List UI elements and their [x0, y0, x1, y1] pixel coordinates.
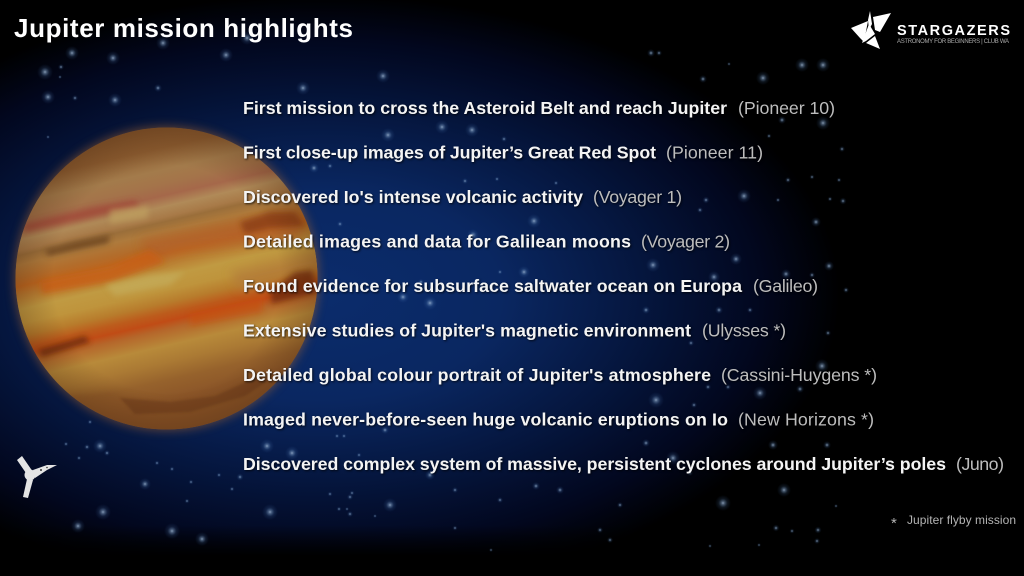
footnote: * — [891, 515, 897, 532]
planet: Jupiter — [8, 120, 324, 436]
footnote — [891, 513, 1016, 532]
mission: Ulysses: (Ulysses *) — [702, 320, 786, 340]
footnote: Jupiter flyby mission — [907, 513, 1016, 527]
mission: Voyager 1: (Voyager 1) — [593, 187, 682, 207]
mission: Galileo: (Galileo) — [753, 276, 818, 296]
mission: Voyager 1: Discovered Io's intense volcanic activity — [243, 187, 583, 207]
mission: Pioneer 10: First mission to cross the Asteroid Belt and reach Jupiter — [243, 98, 727, 118]
mission: Voyager 2: Detailed images and data for Galilean moons — [243, 232, 631, 252]
mission: New Horizons: Imaged never-before-seen huge volcanic eruptions on Io — [243, 410, 728, 430]
logo wordmark: STARGAZERS — [897, 23, 1010, 39]
planet disc with cloud bands — [16, 128, 318, 430]
mission: Ulysses: Extensive studies of Jupiter's magnetic environment — [243, 320, 691, 340]
title: Jupiter mission highlights — [14, 13, 353, 43]
star field — [37, 31, 849, 552]
mission list — [243, 98, 1004, 474]
icon: Juno spacecraft — [17, 456, 57, 498]
mission: New Horizons: (New Horizons *) — [738, 410, 874, 430]
mission: Pioneer 10: (Pioneer 10) — [738, 98, 835, 118]
mission: Pioneer 11: First close-up images of Jupiter’s Great Red Spot — [243, 142, 656, 162]
logo icon: folded star — [851, 11, 891, 49]
mission: Cassini-Huygens: Detailed global colour portrait of Jupiter's atmosphere — [243, 365, 711, 385]
mission: Juno: (Juno) — [956, 454, 1004, 474]
logo: Stargazers — [851, 11, 1010, 49]
mission: Galileo: Found evidence for subsurface saltwater ocean on Europa — [243, 276, 742, 296]
planet glow — [14, 126, 318, 430]
mission: Cassini-Huygens: (Cassini-Huygens *) — [721, 365, 877, 385]
mission: Juno: Discovered complex system of massive, persistent cyclones around Jupiter’s poles — [243, 454, 946, 474]
mission: Pioneer 11: (Pioneer 11) — [666, 142, 763, 162]
mission: Voyager 2: (Voyager 2) — [641, 232, 730, 252]
logo tagline: ASTRONOMY FOR BEGINNERS | CLUB WA — [897, 39, 1009, 45]
